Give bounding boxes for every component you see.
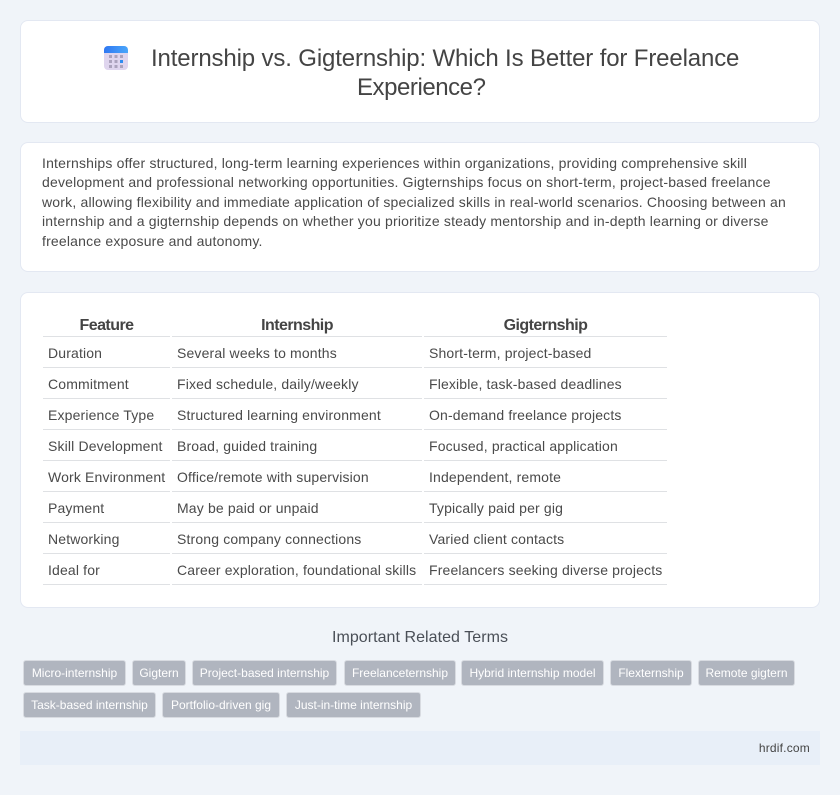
related term tags: [23, 660, 795, 718]
footer source: hrdif.com: [759, 741, 810, 755]
row: Duration: Several weeks to months: [177, 345, 337, 361]
row: Commitment: [48, 376, 622, 392]
tag: Micro-internship: [23, 660, 126, 686]
tag: Task-based internship: [23, 692, 156, 718]
intro text: Internships offer structured, long-term learning experiences within organizations, providing comprehensive skill: [42, 155, 747, 171]
row: Work Environment: Office/remote with supervision: [177, 469, 369, 485]
row: Commitment: Fixed schedule, daily/weekly: [177, 376, 359, 392]
icon: calendar: [104, 46, 128, 70]
row: Work Environment: Independent, remote: [429, 469, 561, 485]
panel: intro: [20, 142, 820, 272]
row: Payment: [48, 500, 563, 516]
panel: comparison table: [20, 292, 820, 608]
row: Networking: Strong company connections: [177, 531, 361, 547]
tag: Just-in-time internship: Just-in-time internship: [295, 698, 412, 712]
row: Networking: [48, 531, 564, 547]
intro text: freelance exposure and autonomy.: [42, 233, 263, 249]
row: Commitment: Flexible, task-based deadlines: [429, 376, 622, 392]
row: Skill Development: [48, 438, 618, 454]
panel: header: [20, 20, 820, 123]
row: Networking: Networking: [48, 531, 120, 547]
tag: Portfolio-driven gig: Portfolio-driven gig: [171, 698, 271, 712]
row: Ideal for: Freelancers seeking diverse projects: [429, 562, 662, 578]
tag: Freelanceternship: Freelanceternship: [352, 666, 448, 680]
row: Experience Type: On-demand freelance projects: [429, 407, 622, 423]
row: Ideal for: Ideal for: [48, 562, 100, 578]
tag: Flexternship: [610, 660, 692, 686]
title: [151, 45, 739, 101]
row: Ideal for: Career exploration, foundational skills: [177, 562, 416, 578]
row: Experience Type: [48, 407, 622, 423]
row: Payment: May be paid or unpaid: [177, 500, 319, 516]
tag: Freelanceternship: [344, 660, 456, 686]
intro text: internship and a gigternship depends on whether you prioritize steady mentorship and in-depth learning or diverse: [42, 213, 769, 229]
row: Experience Type: Experience Type: [48, 407, 154, 423]
title: Internship vs. Gigternship: Which Is Better for Freelance: [151, 45, 739, 72]
tag: Remote gigtern: [698, 660, 795, 686]
row: Duration: [48, 345, 591, 361]
footer bar: [20, 731, 820, 765]
title: Experience?: [357, 74, 485, 101]
tag: Project-based internship: Project-based internship: [200, 666, 329, 680]
tag: Hybrid internship model: [461, 660, 604, 686]
comparison table: [43, 317, 667, 585]
tag: Portfolio-driven gig: [162, 692, 280, 718]
row: Payment: Payment: [48, 500, 104, 516]
tag: Flexternship: Flexternship: [618, 666, 684, 680]
tag: Remote gigtern: Remote gigtern: [705, 666, 788, 680]
intro text: work, allowing flexibility and immediate application of specialized skills in real-world scenarios. Choosing between an: [42, 194, 786, 210]
header: Feature: Feature: [80, 317, 133, 334]
row: Duration: Short-term, project-based: [429, 345, 591, 361]
intro text: [42, 155, 786, 249]
row: Networking: Varied client contacts: [429, 531, 564, 547]
row: Skill Development: Broad, guided training: [177, 438, 317, 454]
row: Duration: Duration: [48, 345, 102, 361]
tag: Micro-internship: Micro-internship: [32, 666, 117, 680]
tag: Just-in-time internship: [286, 692, 421, 718]
row: Experience Type: Structured learning environment: [177, 407, 381, 423]
tag: Task-based internship: Task-based internship: [31, 698, 148, 712]
row: Work Environment: [48, 469, 561, 485]
tag: Gigtern: [132, 660, 186, 686]
row: Commitment: Commitment: [48, 376, 129, 392]
row: Skill Development: Skill Development: [48, 438, 163, 454]
tag: Project-based internship: [192, 660, 337, 686]
header: Internship: Internship: [261, 317, 333, 334]
row: Skill Development: Focused, practical application: [429, 438, 618, 454]
heading: related terms: Important Related Terms: [332, 629, 508, 646]
header: Gigternship: Gigternship: [504, 317, 587, 334]
intro text: development and professional networking opportunities. Gigternships focus on short-term, project-based freelance: [42, 174, 771, 190]
tag: Hybrid internship model: Hybrid internship model: [469, 666, 596, 680]
row: Work Environment: Work Environment: [48, 469, 165, 485]
tag: Gigtern: Gigtern: [139, 666, 179, 680]
row: Payment: Typically paid per gig: [429, 500, 563, 516]
row: Ideal for: [48, 562, 662, 578]
